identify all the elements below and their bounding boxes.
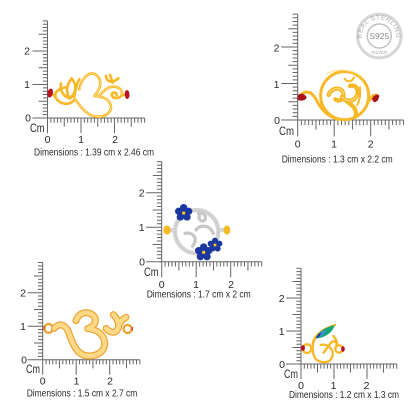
axis labels: 2 bbox=[107, 376, 113, 388]
ruler scale bbox=[286, 268, 397, 379]
axis labels: 1 bbox=[20, 321, 26, 333]
icon: real sterling silver seal bbox=[356, 12, 402, 60]
jewellery: gold om bbox=[43, 313, 133, 356]
axis labels: 2 bbox=[368, 138, 374, 150]
axis labels: 0 bbox=[274, 115, 280, 127]
ruler scale bbox=[32, 21, 145, 133]
axis labels: 2 bbox=[274, 42, 280, 54]
axis labels: 2 bbox=[20, 288, 26, 300]
panel: gold om with rings, 1.5 cm x 2.7 cm bbox=[20, 263, 140, 400]
axis labels bbox=[139, 188, 234, 291]
axis labels: 1 bbox=[139, 222, 145, 234]
axis labels: Cm bbox=[30, 123, 44, 135]
axis labels bbox=[20, 288, 113, 388]
jewellery: silver om ring bbox=[163, 204, 230, 260]
axis labels: 0 bbox=[139, 256, 145, 268]
jewellery: om with feather bbox=[301, 325, 345, 362]
blue flowers bbox=[175, 204, 222, 260]
axis labels: 1 bbox=[74, 376, 80, 388]
axis labels: 2 bbox=[24, 46, 30, 58]
red accents bbox=[43, 326, 45, 330]
axis labels: 2 bbox=[279, 293, 285, 305]
dimensions caption: Dimensions : 1.7 cm x 2 cm bbox=[147, 290, 251, 300]
icon: real sterling silver seal: SILVER bbox=[371, 50, 388, 55]
axis labels: 0 bbox=[279, 359, 285, 371]
axis labels: 2 bbox=[228, 279, 234, 291]
axis labels: 0 bbox=[295, 138, 301, 150]
axis labels: Cm bbox=[284, 369, 298, 381]
axis labels: 1 bbox=[78, 134, 84, 146]
icon: real sterling silver seal: S925 bbox=[369, 31, 389, 41]
ruler scale bbox=[281, 14, 404, 136]
axis labels: 0 bbox=[45, 134, 51, 146]
panel: round om pendant, 1.3 cm x 2.2 cm bbox=[274, 12, 404, 166]
red beads bbox=[301, 345, 305, 351]
peacock feather bbox=[316, 325, 335, 338]
axis labels: 2 bbox=[364, 380, 370, 392]
axis labels: 0 bbox=[40, 376, 46, 388]
ruler scale bbox=[146, 162, 262, 277]
axis labels: 0 bbox=[159, 279, 165, 291]
jewellery: om in circle bbox=[297, 70, 379, 120]
axis labels: 2 bbox=[139, 188, 145, 200]
panel: om with peacock feather, 1.2 cm x 1.3 cm bbox=[279, 268, 399, 401]
jewellery: lotus om bbox=[47, 74, 129, 117]
dimensions caption: Dimensions : 1.39 cm x 2.46 cm bbox=[34, 148, 154, 158]
panel: lotus om pendant, 1.39 cm x 2.46 cm bbox=[24, 21, 154, 158]
axis labels: Cm bbox=[144, 267, 158, 279]
axis labels: 0 bbox=[298, 380, 304, 392]
axis labels: 1 bbox=[279, 326, 285, 338]
axis labels bbox=[24, 46, 118, 146]
yellow gems bbox=[163, 225, 171, 235]
axis labels: 1 bbox=[331, 380, 337, 392]
panel: silver om with blue flowers, 1.7 cm x 2 cm bbox=[139, 162, 262, 300]
axis labels: 1 bbox=[193, 279, 199, 291]
ruler scale bbox=[28, 263, 140, 375]
axis labels: 2 bbox=[112, 134, 118, 146]
axis labels: 1 bbox=[24, 79, 30, 91]
icon: real sterling silver seal: REAL STERLING bbox=[358, 15, 400, 38]
axis labels: 1 bbox=[331, 138, 337, 150]
axis labels bbox=[274, 42, 374, 150]
dimensions caption: Dimensions : 1.5 cm x 2.7 cm bbox=[27, 388, 137, 400]
red beads bbox=[297, 94, 307, 101]
axis labels: 0 bbox=[21, 354, 27, 366]
axis labels: 0 bbox=[25, 112, 31, 124]
axis labels: 1 bbox=[274, 79, 280, 91]
dimensions caption: Dimensions : 1.3 cm x 2.2 cm bbox=[282, 154, 393, 166]
red beads bbox=[47, 89, 53, 98]
axis labels: Cm bbox=[26, 364, 40, 376]
axis labels: Cm bbox=[279, 126, 294, 138]
axis labels bbox=[279, 293, 370, 392]
